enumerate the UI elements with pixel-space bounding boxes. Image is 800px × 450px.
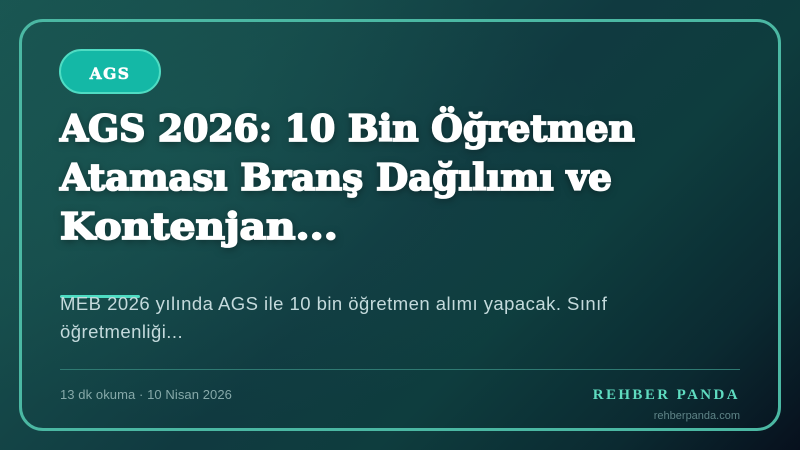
accent line	[60, 295, 140, 298]
category badge	[59, 49, 161, 94]
title: Kontenjan...	[60, 206, 338, 248]
description: öğretmenliği...	[60, 321, 183, 342]
title	[58, 106, 635, 250]
brand name: REHBER PANDA	[593, 387, 740, 403]
title: Ataması Branş Dağılımı ve	[60, 157, 612, 199]
description	[60, 293, 607, 342]
title: AGS 2026: 10 Bin Öğretmen	[60, 108, 635, 150]
category badge: AGS	[90, 64, 130, 83]
website: rehberpanda.com	[654, 410, 740, 422]
description: MEB 2026 yılında AGS ile 10 bin öğretmen alımı yapacak. Sınıf	[60, 293, 607, 314]
reading time and date: 13 dk okuma · 10 Nisan 2026	[60, 387, 232, 402]
